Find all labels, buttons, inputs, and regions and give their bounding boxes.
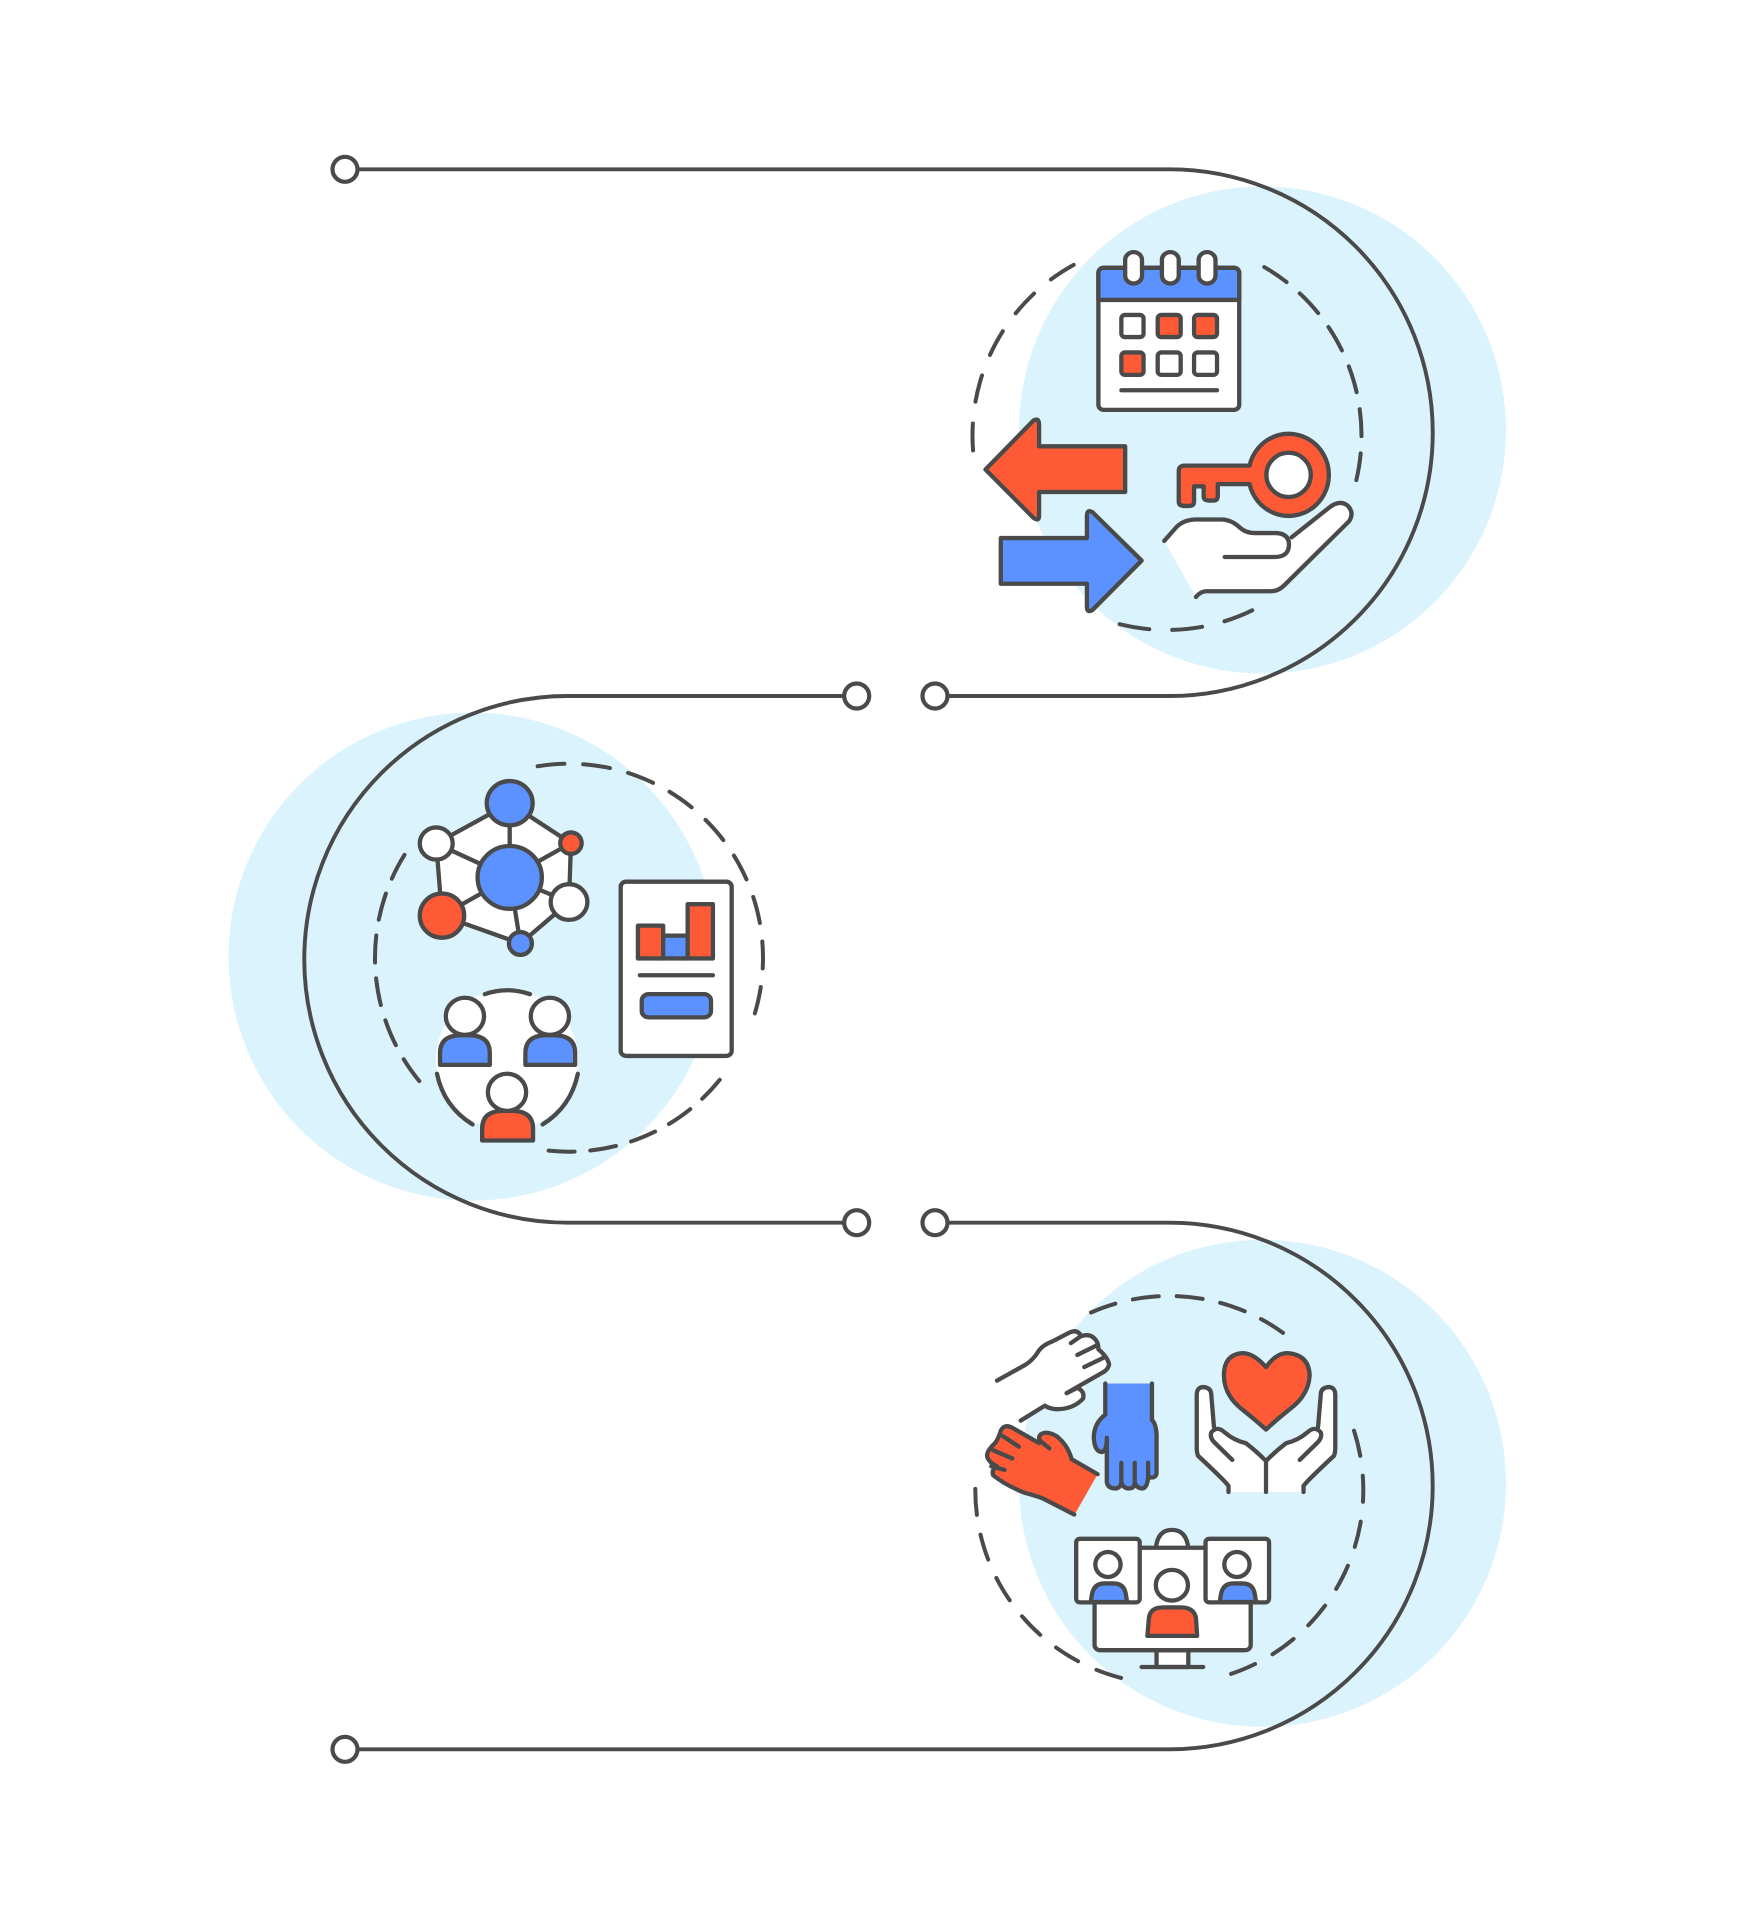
dashed ring: step 3 [914, 1234, 1425, 1746]
icon: key [1179, 434, 1329, 516]
dashed ring: step 2 [296, 685, 842, 1231]
panel: step 1 icons [985, 252, 1352, 611]
dashed ring: step 1 [901, 170, 1433, 701]
icon: video conference monitor [1076, 1530, 1269, 1667]
icon: network graph [420, 781, 587, 955]
icon: blue arrow right [1001, 511, 1142, 611]
icon: red arrow left [985, 419, 1125, 519]
icon: hands holding heart [1197, 1353, 1335, 1492]
connector line: step 1 [332, 157, 1433, 709]
background circle: step 2 [228, 713, 716, 1201]
connector line: step 3 [332, 1210, 1433, 1762]
background circle: step 1 [1019, 186, 1506, 674]
icon: blue hand [1094, 1384, 1157, 1488]
panel: step 3 icons [987, 1331, 1335, 1667]
background circle: step 3 [1019, 1240, 1506, 1727]
icon: red hand [987, 1425, 1098, 1515]
icon: white hand [997, 1331, 1109, 1421]
icon: calendar [1098, 252, 1239, 410]
icon: open hand [1164, 503, 1352, 597]
panel: step 2 icons [420, 781, 732, 1141]
icon: report document [621, 882, 732, 1056]
connector line: step 2 [304, 684, 869, 1235]
icon: team of three [436, 990, 578, 1141]
